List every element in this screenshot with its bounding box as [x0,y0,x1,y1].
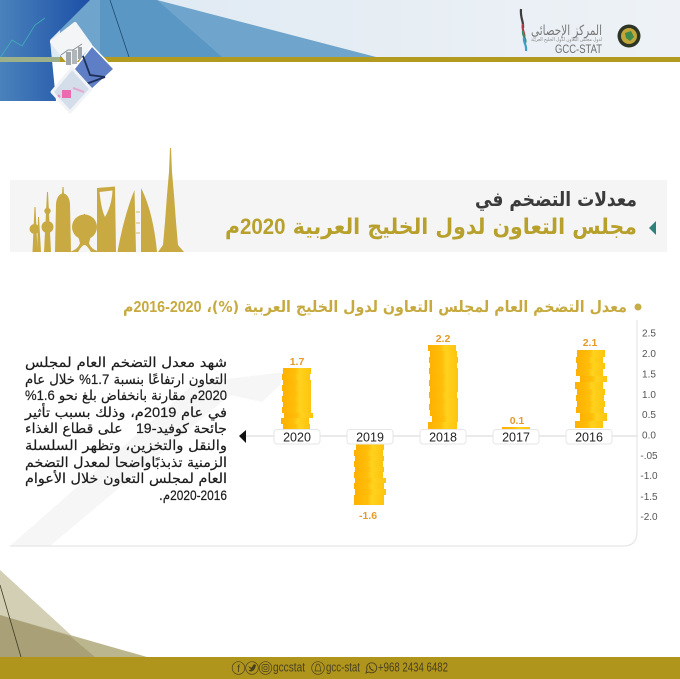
description text: جائحة كوفيد-19 على قطاع الغذاء [25,421,227,437]
value 2.2: 2.2 [436,333,450,345]
chart heading [123,298,642,316]
watermark arrow [10,372,285,546]
icon: gulf skyline [30,148,184,252]
phone number: +968 2434 6482 [378,660,448,674]
bar: 2019 [354,444,386,505]
value -1.6: -1.6 [359,510,377,522]
y axis labels: 1.0 [642,390,656,401]
year label 2016 [566,430,612,444]
y axis labels: -.05 [640,451,658,462]
title band [10,180,667,252]
handle gcc-stat: gcc-stat [326,660,360,674]
icon: facebook: f [237,664,240,675]
year label 2020 [274,430,320,444]
chart frame [10,320,637,546]
description text: 2020-2016م. [159,488,227,504]
logo subtitle arabic: لدول مجلس التعاون لدول الخليج العربية [531,37,602,43]
icon: GCC emblem [618,24,640,48]
icon: facebook [232,662,245,675]
description text: العام لمجلس التعاون خلال الأعوام [25,470,227,487]
description text: التعاون ارتفاعًا بنسبة 1.7% خلال عام [25,372,227,388]
header photo diamonds [52,24,114,112]
y axis labels [640,328,658,523]
bar: 2016 [575,350,607,428]
icon: document photo diamond [52,68,91,112]
logo: GCC-STAT [521,9,640,56]
chart baseline [245,435,637,437]
y axis labels: 0.0 [642,430,656,442]
description text: في عام 2019م، وذلك بسبب تأثير [24,403,227,421]
value 1.7: 1.7 [290,356,304,368]
description text [24,355,227,504]
logo wordmark latin: GCC-STAT [555,44,602,56]
year label 2020: 2020 [283,430,311,444]
icon: instagram [259,662,272,674]
footer band [0,657,680,679]
value 2.1: 2.1 [583,337,597,349]
title heading line 1: معدلات التضخم في [475,187,637,212]
icon: snapchat [312,662,324,674]
y axis labels: 2.5 [642,328,656,340]
description text: الزمنية تذبذبًاواضحا لمعدل التضخم [25,455,227,471]
y axis labels: -1.0 [640,471,658,482]
year label 2017: 2017 [502,430,530,444]
description text: شهد معدل التضخم العام لمجلس [25,355,227,371]
icon: heading bullet [634,304,642,310]
y axis labels: 1.5 [642,370,656,380]
handle gccstat: gccstat [273,660,305,674]
icon: teal title arrow [649,221,656,235]
heading text: معدل التضخم العام لمجلس التعاون لدول الخليج العربية (%)، 2020-2016م [123,298,627,316]
year label 2018: 2018 [429,430,457,444]
value 0.1: 0.1 [510,415,524,427]
year label 2018 [420,430,466,444]
year label 2017 [493,430,539,444]
icon: white diamond with bar chart [52,24,90,65]
y axis labels: -2.0 [640,512,658,523]
icon: whatsapp [366,663,377,673]
bar: 2017 [502,427,530,429]
icon: baseline arrow [239,430,246,443]
y axis labels: 2.0 [642,349,656,360]
description text: 2020م مقارنة بانخفاض بلغ نحو 1.6% [25,388,227,404]
icon: blue photo diamond [74,46,114,90]
footer contacts [232,660,448,675]
year label 2016: 2016 [575,430,603,444]
bar: 2020 [281,368,313,429]
corner triangles [0,570,147,657]
logo wordmark arabic: المركز الإحصائي [531,23,602,39]
bar: 2018 [428,345,458,429]
description text: والنقل والتخزين، وتظهر السلسلة [25,438,227,454]
icon: colored ribbon [521,9,526,51]
title heading line 2: مجلس التعاون لدول الخليج العربية 2020م [225,214,637,240]
year label 2019: 2019 [356,430,384,444]
icon: twitter [246,662,258,674]
y axis labels: 0.5 [642,410,656,421]
year label 2019 [347,430,393,444]
y axis labels: -1.5 [640,492,658,503]
header banner [0,0,680,101]
